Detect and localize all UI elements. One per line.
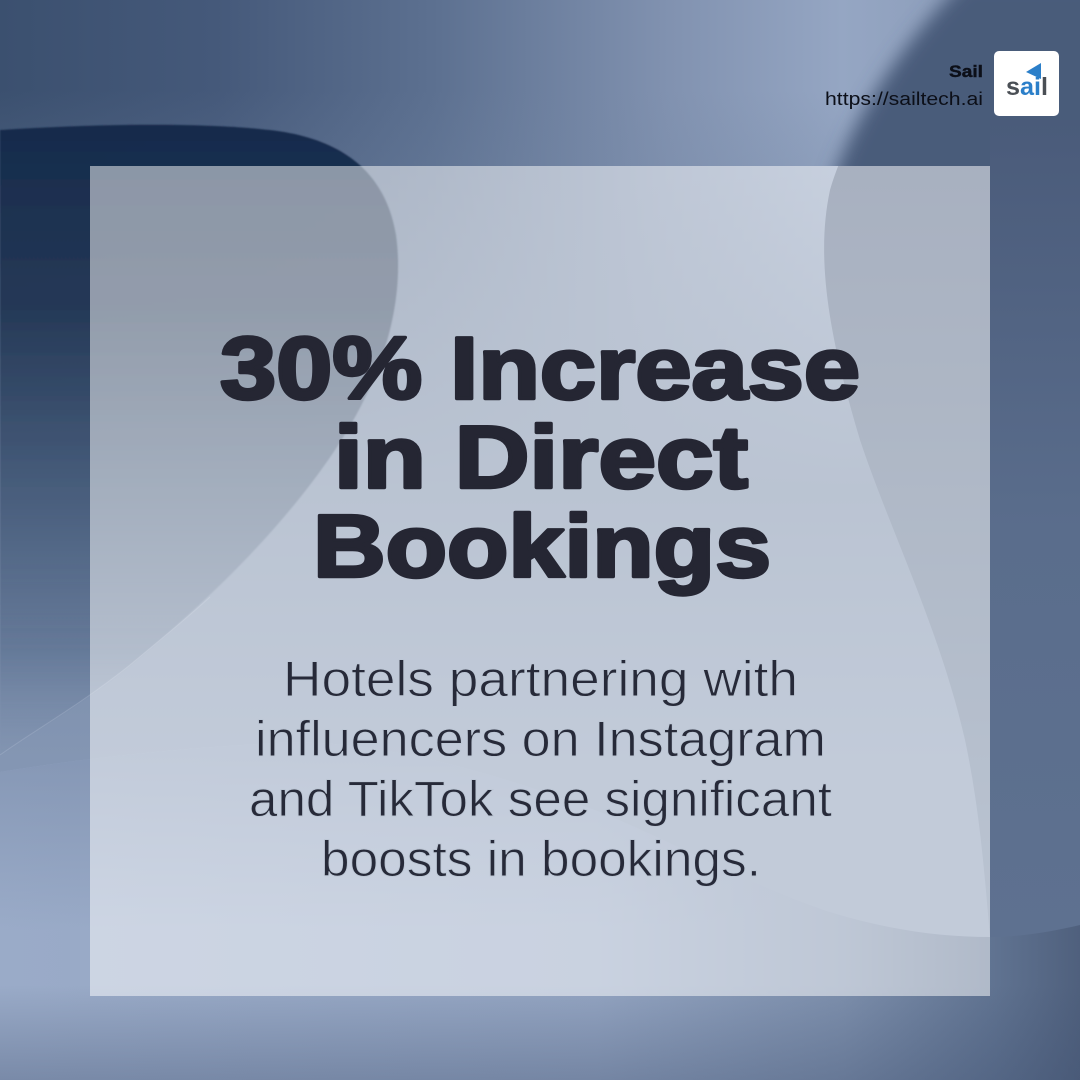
logo wordmark: sail (1006, 73, 1048, 101)
brand name and url: Sail (949, 62, 983, 81)
body text (249, 651, 832, 887)
body text: boosts in bookings. (321, 831, 761, 887)
panel: content card (90, 166, 990, 996)
logo (994, 51, 1059, 116)
heading: in Direct (334, 408, 748, 506)
heading (220, 318, 860, 596)
brand name and url (825, 62, 983, 109)
heading: Bookings (313, 496, 771, 596)
icon: sail flag (1026, 63, 1041, 79)
brand name and url: https://sailtech.ai (825, 89, 983, 109)
heading: 30% Increase (220, 318, 860, 418)
body text: Hotels partnering with (283, 651, 798, 707)
body text: influencers on Instagram (255, 711, 826, 767)
body text: and TikTok see significant (249, 771, 832, 827)
